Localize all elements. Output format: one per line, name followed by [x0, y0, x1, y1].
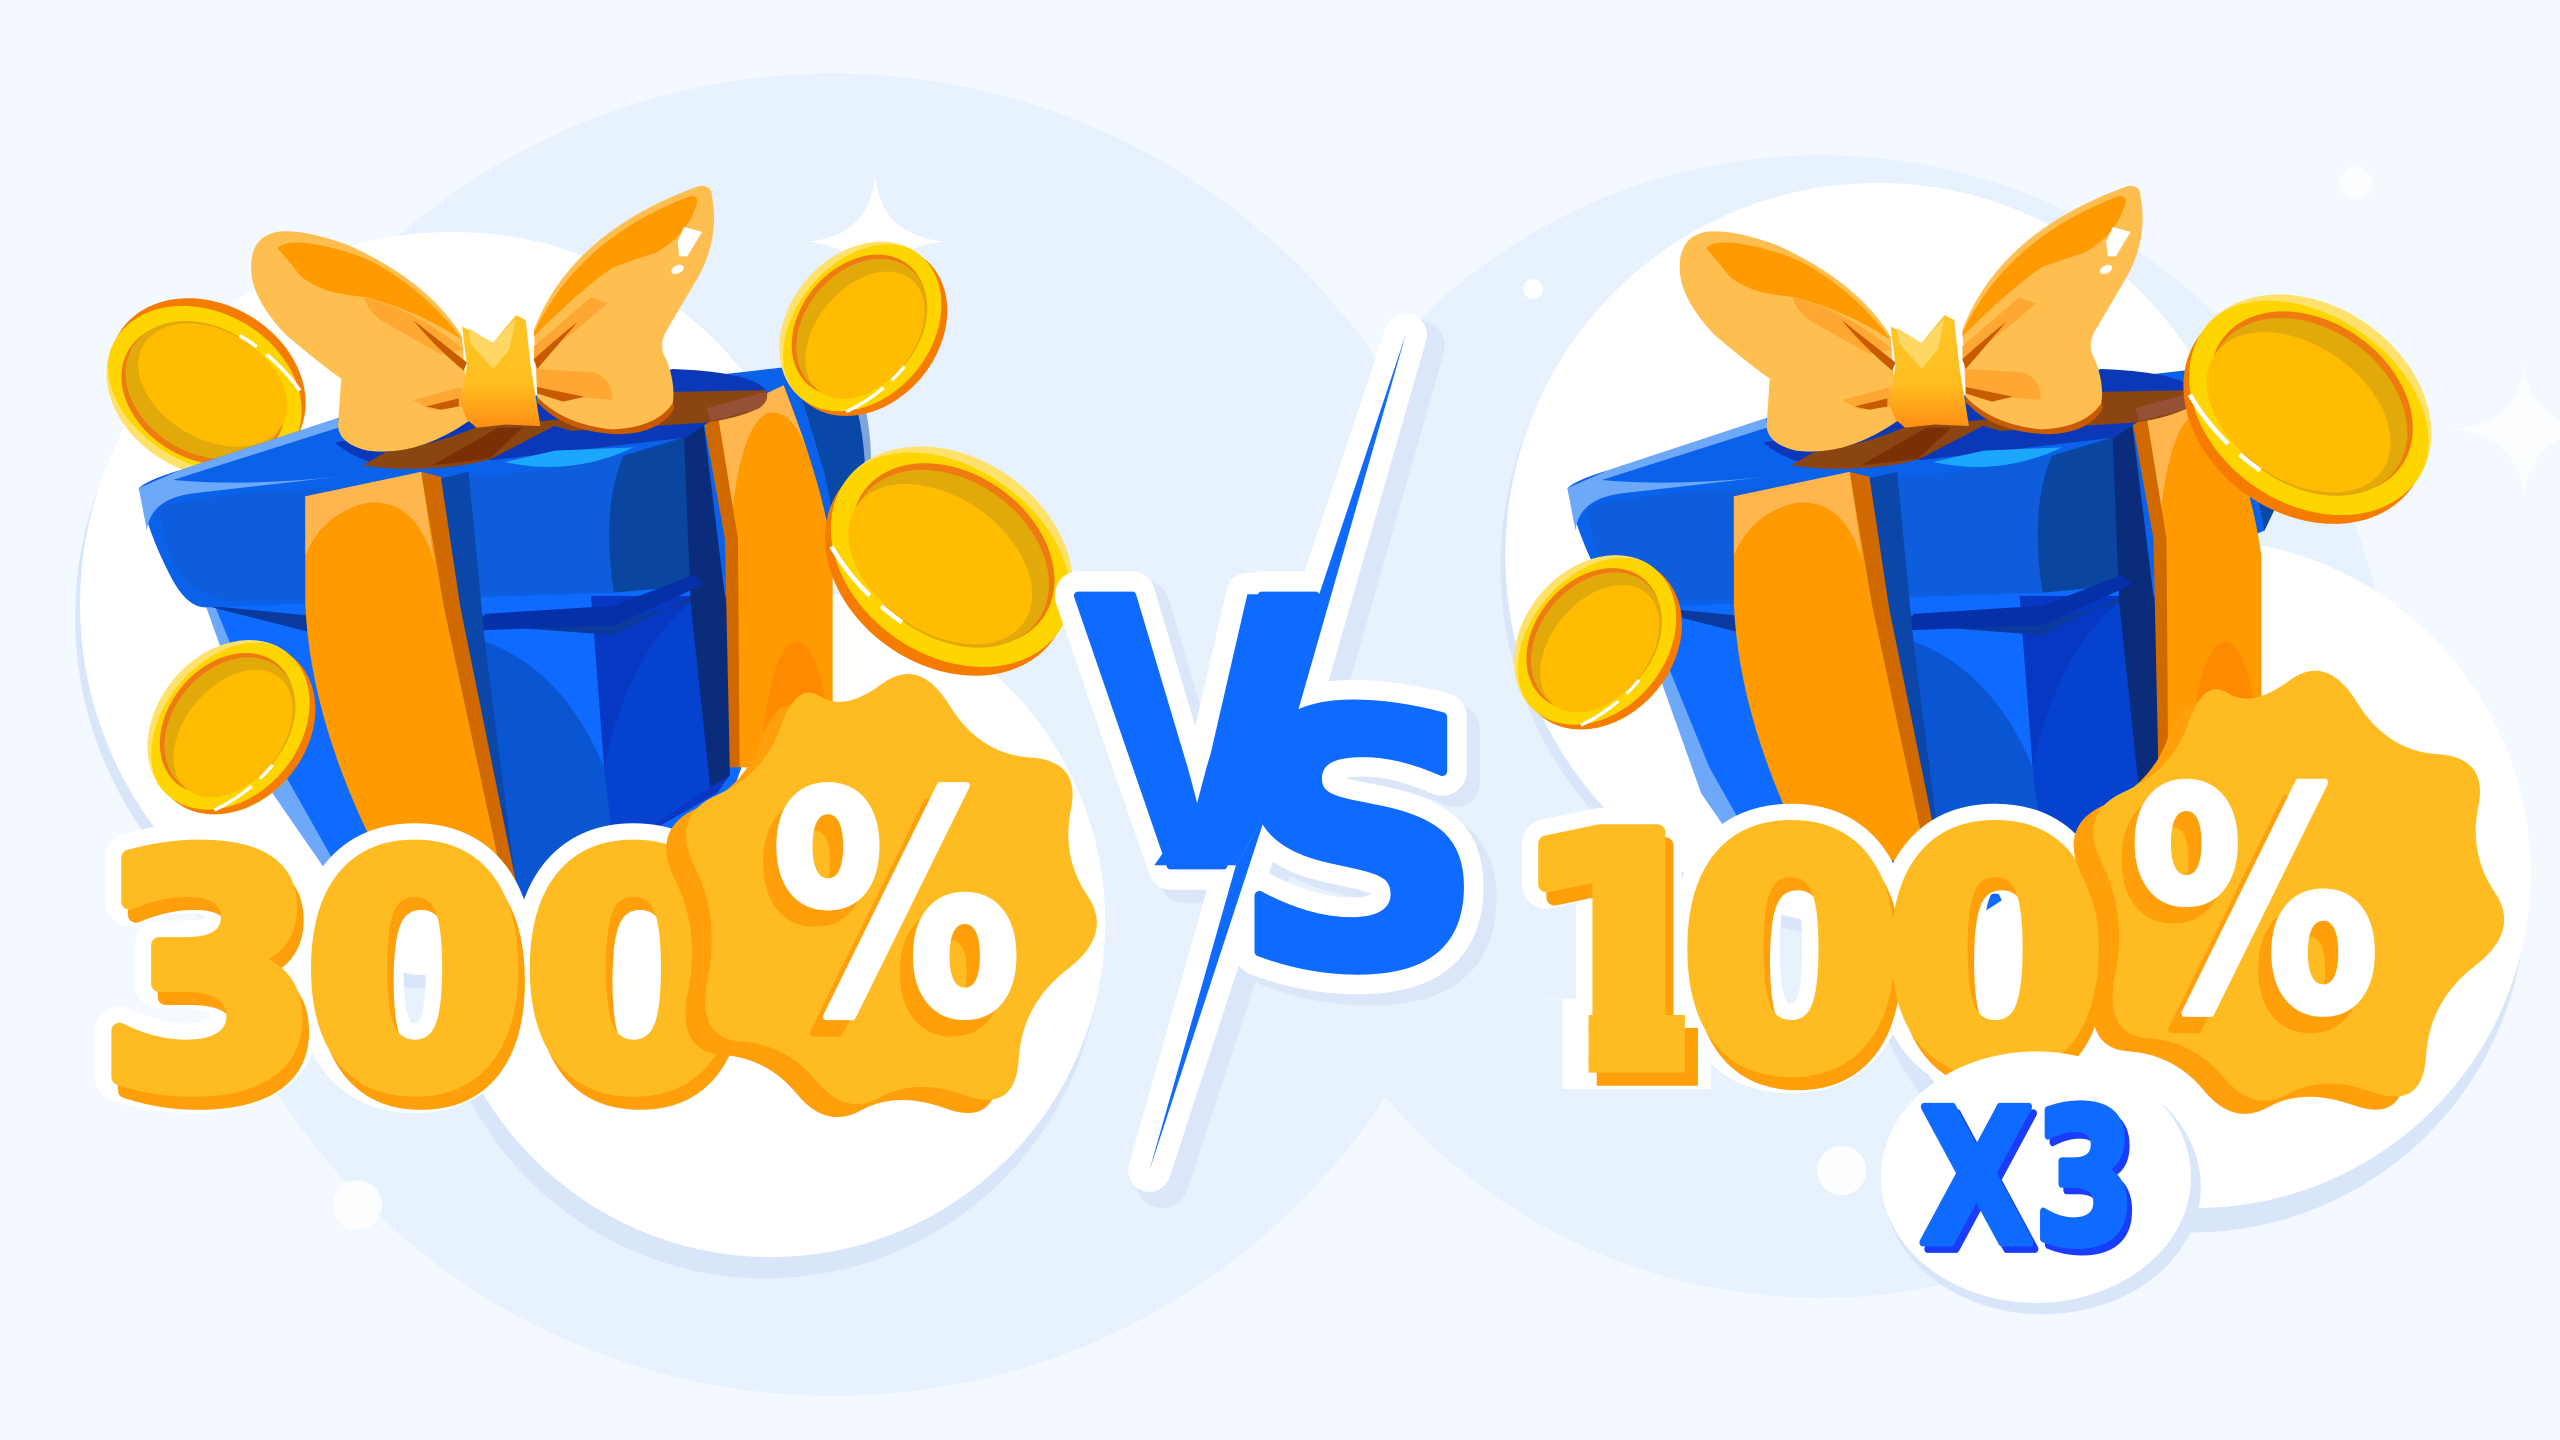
dot: lower centre [1817, 1146, 1866, 1195]
background circle: left [171, 73, 1494, 1396]
sparkle: left [808, 175, 944, 307]
white blob: right shadow [1500, 194, 2526, 1233]
number: 300: 300 [105, 802, 751, 1173]
white blob: left [80, 232, 1105, 1257]
background circle: right [1249, 155, 2392, 1298]
versus emblem: V [1075, 511, 1320, 949]
gift box: right [1567, 186, 2300, 922]
dot: upper right [2340, 167, 2372, 199]
versus emblem [1075, 335, 1498, 1182]
versus emblem: S [1232, 639, 1485, 1048]
number: 100: 1 [1510, 769, 1732, 1140]
badge: left percent: % [771, 729, 1021, 1084]
multiplier bubble: x3: X3 [1925, 1076, 2141, 1293]
badge: right percent [2074, 671, 2504, 1114]
multiplier bubble: x3 [1881, 1051, 2201, 1314]
multiplier bubble: x3: X3 [1920, 1069, 2136, 1287]
white blob: right [1505, 183, 2531, 1208]
versus emblem: S [1245, 650, 1498, 1059]
dot: lower left [333, 1180, 382, 1229]
versus emblem: V [1075, 511, 1320, 949]
coin: left gift, back left [75, 264, 338, 512]
versus emblem: V [1088, 523, 1333, 961]
number: 100: 00 [1687, 783, 2112, 1154]
number: 300: 300 [98, 789, 744, 1160]
number: 100: 1 [1510, 769, 1732, 1140]
versus emblem: S [1232, 639, 1485, 1048]
number: 100 [1522, 804, 2100, 1094]
gift box: left [139, 186, 871, 922]
dot: upper centre [1523, 279, 1543, 299]
number: 100: 1 [1519, 783, 1740, 1154]
coin: left gift, lower left [114, 608, 349, 847]
white blob: left shadow [75, 245, 1100, 1278]
badge: right percent: % [2130, 725, 2380, 1081]
badge: right percent: % [2116, 742, 2367, 1098]
number: 300: 300 [98, 789, 744, 1160]
badge: left percent: % [758, 745, 1008, 1101]
coin: right gift, left [1481, 523, 1716, 762]
badge: left percent [666, 674, 1097, 1117]
coin: right gift, large top right [2140, 249, 2474, 570]
coin: left gift, top right [746, 209, 981, 449]
number: 100: 00 [1680, 769, 2106, 1140]
coin: left gift, large right [782, 401, 1115, 722]
number: 100: 00 [1680, 769, 2106, 1140]
sparkle: right [2454, 362, 2560, 498]
